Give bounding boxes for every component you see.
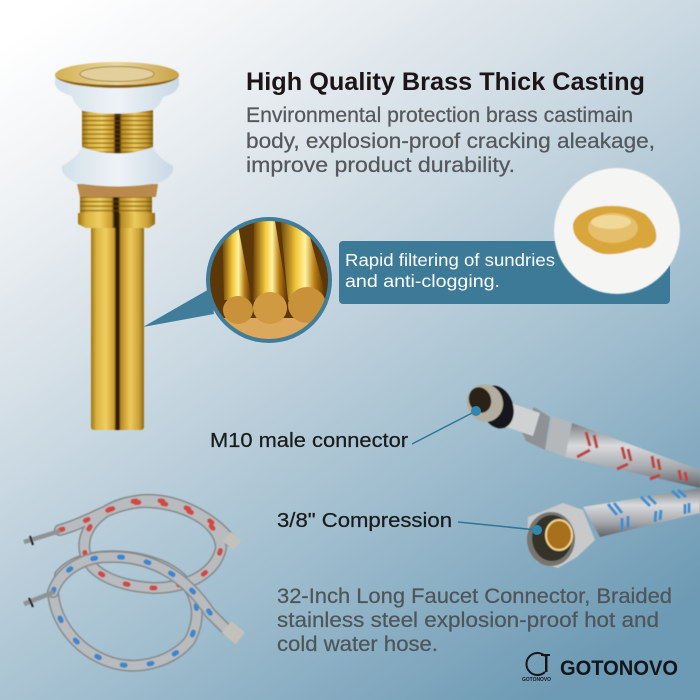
callout text: and anti-clogging.	[345, 271, 500, 291]
icon: upper hose with male connector	[462, 379, 700, 488]
blue hose fittings	[24, 592, 245, 644]
nut inner	[532, 515, 572, 561]
drain tube	[91, 226, 144, 430]
panel: filtering callout	[339, 241, 670, 304]
text block: hose description: stainless steel explosion-proof hot and	[277, 609, 659, 632]
icon: gold pop-up drain	[55, 62, 179, 430]
icon: coiled braided hoses	[24, 500, 245, 666]
red markings	[577, 432, 687, 481]
logo wordmark: GOTONOVO	[560, 657, 678, 680]
icon: gold droplet on white circle	[554, 168, 680, 294]
teal box	[339, 241, 670, 304]
red hose	[60, 500, 231, 588]
leader: M10 connector	[412, 406, 481, 444]
nut opening	[527, 512, 575, 566]
red hose fittings	[24, 531, 241, 550]
smooth tube	[503, 403, 540, 436]
lower thread	[80, 192, 152, 215]
ferrule	[545, 416, 572, 457]
upper thread	[82, 108, 153, 158]
white collar	[62, 147, 173, 186]
gold rim	[55, 75, 179, 88]
text block: hose description: cold water hose.	[277, 633, 438, 656]
black o-ring	[474, 381, 520, 433]
logo small text: GOTONOVO	[522, 677, 551, 683]
braided hose	[583, 488, 700, 537]
callout: brass rods detail	[205, 215, 335, 345]
text block: brass description	[246, 103, 655, 177]
hex brass nut	[77, 184, 158, 197]
label: 3/8 compression: 3/8" Compression	[277, 510, 452, 532]
gold cap	[55, 62, 179, 88]
heading: High Quality Brass Thick Casting	[246, 68, 645, 96]
knurled nut	[78, 213, 155, 228]
hex nut	[527, 503, 595, 568]
icon: lower hose with compression nut	[527, 488, 700, 568]
blue markings	[608, 490, 689, 530]
arrow: callout pointer	[143, 288, 214, 327]
braided hose	[565, 423, 700, 488]
brass ring	[546, 520, 572, 550]
text block: brass description: improve product durability.	[246, 153, 515, 177]
callout text	[345, 250, 555, 291]
nut	[522, 407, 550, 450]
blue hose lower loop	[53, 556, 197, 666]
text block: hose description: 32-Inch Long Faucet Connector, Braided	[277, 585, 672, 608]
rods	[210, 221, 328, 339]
logo: GOTONOVO	[522, 653, 678, 683]
logo mark	[526, 653, 550, 675]
white flange underside	[55, 78, 179, 114]
threaded end	[462, 379, 508, 427]
opening	[465, 384, 495, 416]
label: M10 male connector: M10 male connector	[210, 430, 408, 452]
text block: brass description: body, explosion-proof cracking aleakage,	[246, 129, 655, 153]
cap centre	[80, 66, 154, 82]
leader: compression	[458, 522, 542, 535]
callout text: Rapid filtering of sundries	[345, 250, 555, 270]
circle border	[206, 217, 332, 343]
text block: hose description	[277, 585, 672, 656]
text block: brass description: Environmental protection brass castimain	[246, 103, 633, 127]
blue hose upper strand	[53, 557, 226, 629]
